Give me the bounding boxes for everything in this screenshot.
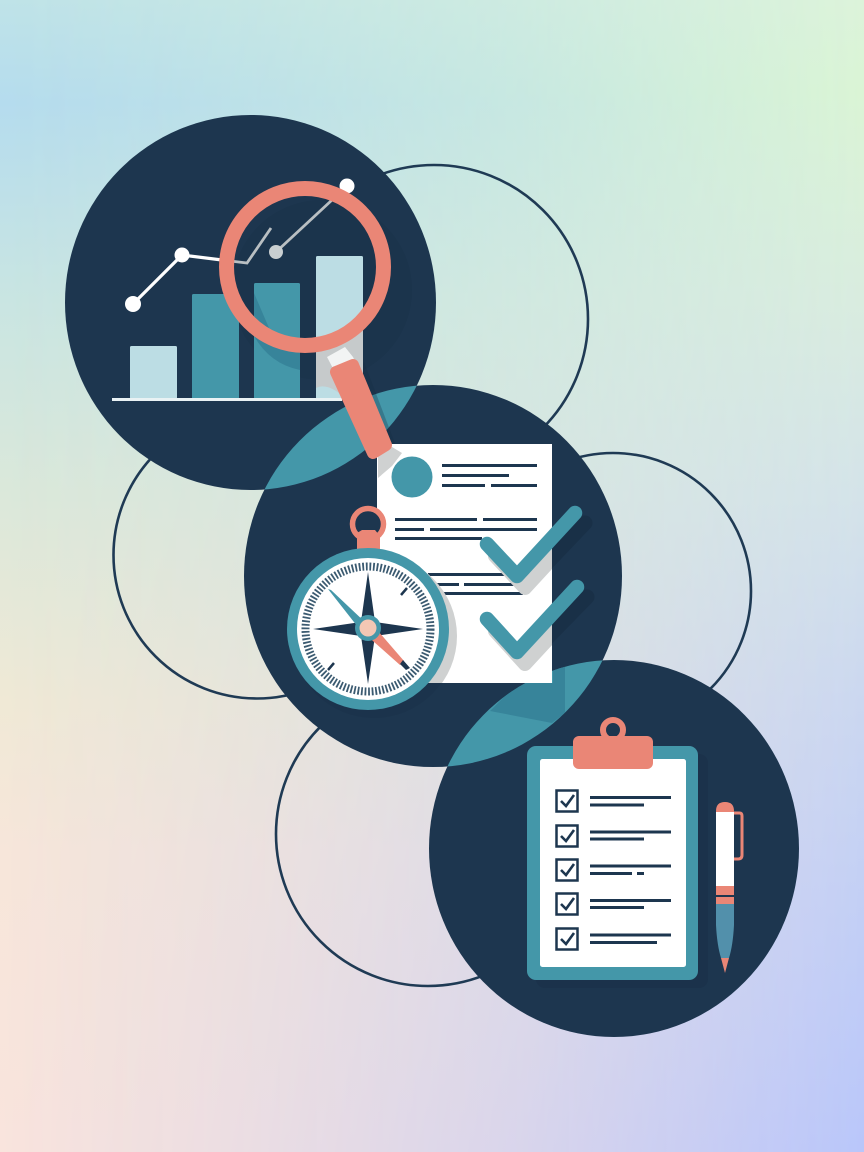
icon: magnifying glass bbox=[226, 188, 386, 453]
compass face bbox=[297, 558, 439, 700]
compass shadow on dark bbox=[292, 554, 456, 718]
document bbox=[377, 444, 587, 683]
line chart bbox=[125, 178, 354, 312]
overlap lens: middle and bottom circles bbox=[448, 660, 602, 766]
clipboard paper bbox=[540, 759, 686, 967]
dark circles bbox=[65, 115, 799, 1037]
icon: compass bbox=[287, 508, 457, 718]
document text lines bbox=[395, 464, 537, 595]
check mark shadows on page bbox=[488, 549, 552, 671]
clipboard clip bbox=[573, 736, 653, 769]
checklist row 3 bbox=[556, 860, 671, 880]
pen body bbox=[716, 904, 734, 958]
handle shadow on page bbox=[378, 447, 402, 478]
magnifier handle shadow bbox=[350, 362, 396, 462]
check mark shadows on circle bbox=[545, 523, 587, 640]
checklist row 1 bbox=[556, 790, 671, 812]
chart bars bbox=[130, 256, 363, 399]
pen clip bbox=[734, 813, 742, 859]
checklist row 2 bbox=[556, 826, 671, 846]
icon: pen bbox=[716, 802, 742, 973]
bar chart bbox=[112, 178, 363, 401]
clipboard board bbox=[527, 746, 698, 980]
chart baseline bbox=[112, 398, 342, 401]
compass body bbox=[287, 548, 449, 710]
compass hub bbox=[355, 615, 381, 641]
pen cap bbox=[716, 802, 734, 812]
compass hub centre bbox=[360, 620, 376, 636]
icon: clipboard bbox=[527, 720, 708, 988]
compass teal needle bbox=[328, 589, 367, 631]
overlap lens: top and middle circles bbox=[264, 386, 417, 490]
document avatar bbox=[392, 456, 432, 498]
outline circles bbox=[114, 165, 751, 986]
check mark two bbox=[487, 587, 577, 652]
check mark one bbox=[487, 513, 575, 576]
compass ring loop bbox=[352, 508, 384, 540]
bar shadow crescent bbox=[254, 293, 300, 370]
compass tick marks bbox=[306, 566, 430, 692]
document sheet bbox=[377, 444, 552, 683]
clipboard clip ring bbox=[603, 720, 623, 740]
checklist row 4 bbox=[556, 894, 671, 914]
bar shadow grey bbox=[316, 330, 363, 399]
pen barrel bbox=[716, 812, 734, 886]
checklist row 5 bbox=[556, 928, 671, 950]
compass needle tip bbox=[400, 660, 410, 670]
magnifier neck bbox=[327, 347, 360, 378]
compass coral needle bbox=[365, 624, 404, 665]
magnifier ring bbox=[226, 188, 384, 346]
compass quarter marks bbox=[328, 588, 407, 670]
pen tip bbox=[721, 958, 729, 973]
magnifier handle bbox=[336, 365, 386, 453]
pen bands bbox=[716, 886, 734, 904]
magnifier soft shadow bbox=[232, 200, 412, 380]
compass star bbox=[313, 572, 423, 684]
compass shadow on page bbox=[425, 572, 457, 683]
clipboard shadow bbox=[536, 754, 708, 988]
compass stem bbox=[357, 530, 380, 550]
